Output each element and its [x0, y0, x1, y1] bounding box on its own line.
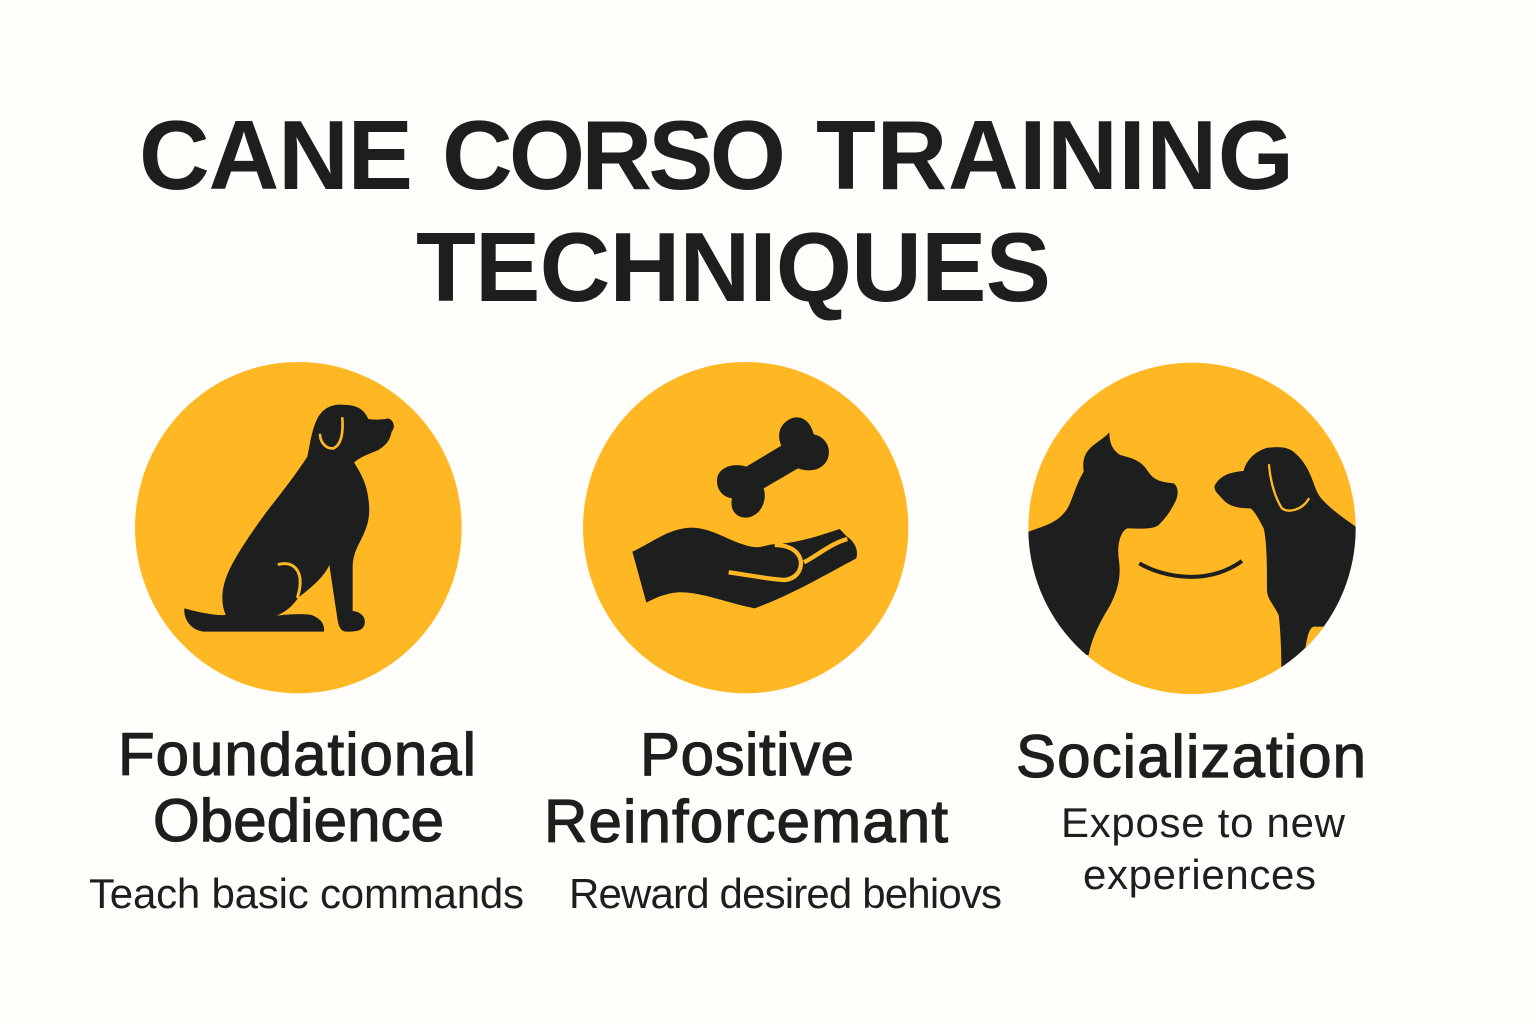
description: expose to new experiences [1061, 799, 1346, 898]
description: expose to new experiences: Expose to new [1061, 799, 1346, 846]
heading: foundational obedience: Obedience [153, 787, 444, 854]
icon: two dogs facing each other in yellow circle [1022, 363, 1357, 694]
title: TECHNIQUES [416, 212, 1051, 322]
title [139, 100, 1294, 322]
heading: positive reinforcement [544, 721, 948, 855]
description: teach basic commands: Teach basic commands [89, 870, 524, 917]
heading: positive reinforcement: Reinforcemant [544, 788, 948, 855]
title: CORSO [442, 100, 786, 210]
description: expose to new experiences: experiences [1083, 851, 1316, 898]
panel: socialization [1016, 363, 1366, 898]
title: CANE [139, 100, 413, 210]
heading: positive reinforcement: Positive [640, 721, 854, 788]
heading: foundational obedience [118, 721, 476, 854]
icon: bone above open hand in yellow circle [583, 362, 908, 693]
description: reward desired behaviors: Reward desired behiovs [569, 870, 1002, 917]
title: TRAINING [816, 100, 1294, 210]
heading: socialization: Socialization [1016, 723, 1366, 790]
icon: sitting dog in yellow circle [135, 362, 462, 693]
heading: foundational obedience: Foundational [118, 721, 476, 788]
panel: positive reinforcement [544, 362, 1002, 917]
panel: foundational obedience [89, 362, 524, 917]
